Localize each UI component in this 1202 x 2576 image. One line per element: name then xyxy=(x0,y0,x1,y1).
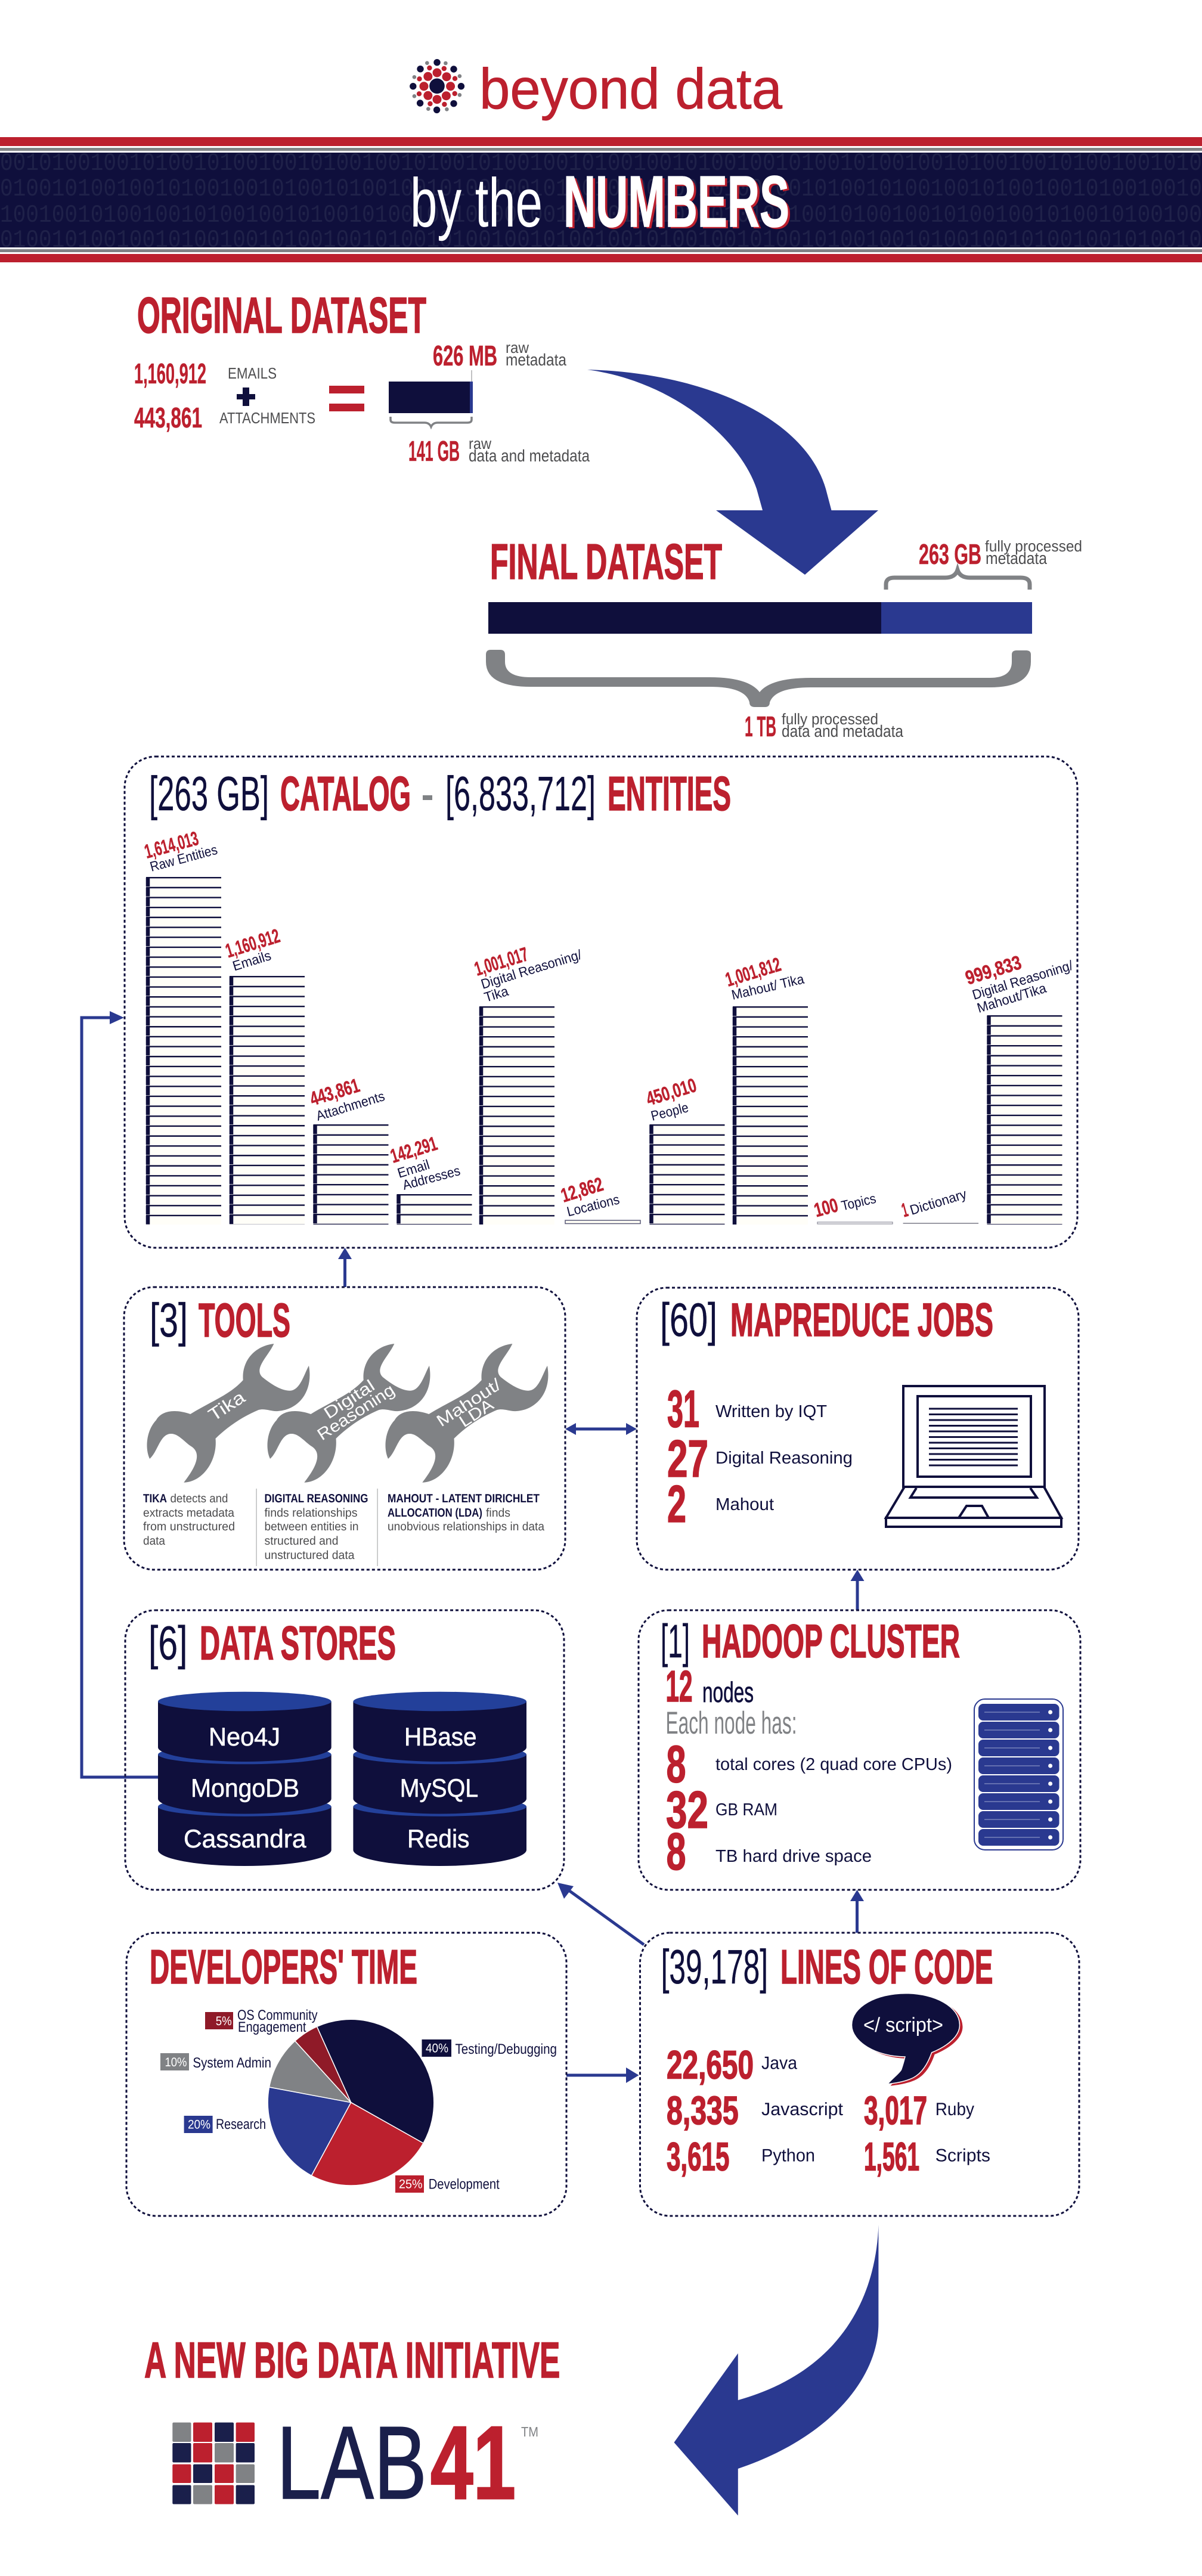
mapreduce counts: 2 xyxy=(667,1474,686,1533)
tika description: data xyxy=(143,1535,166,1548)
code counts: 22,650 xyxy=(667,2043,754,2088)
digital reasoning description: finds relationships xyxy=(265,1506,358,1520)
final dataset bar: fully processed xyxy=(782,710,878,728)
panel: data stores xyxy=(125,1610,564,1890)
icon: lab41 square grid xyxy=(172,2423,255,2504)
code counts xyxy=(667,2043,990,2180)
legend: research: 20% xyxy=(188,2118,210,2132)
original dataset bar: metadata xyxy=(506,351,566,369)
bar: emails xyxy=(223,925,305,1225)
legend: system admin: 10% xyxy=(165,2056,187,2069)
lines of code heading: LINES OF CODE xyxy=(780,1940,993,1994)
mapreduce heading: [60] xyxy=(660,1293,717,1346)
original dataset bar: 626 MB xyxy=(433,340,497,372)
digital reasoning description: between entities in xyxy=(265,1520,359,1533)
original dataset bar: 141 GB xyxy=(408,436,460,467)
code counts: 8,335 xyxy=(667,2088,739,2133)
logo: lab41: 41 xyxy=(430,2404,516,2521)
node spec list: 12 xyxy=(665,1661,693,1711)
bar: email addresses: 142,291 xyxy=(388,1132,440,1167)
banner title: NUMBERS xyxy=(563,161,789,242)
bar: attachments: Attachments xyxy=(314,1088,386,1124)
code counts: 3,615 xyxy=(667,2135,729,2180)
final dataset bar: data and metadata xyxy=(782,722,903,740)
node spec list: 8 xyxy=(667,1822,686,1881)
legend: os community engagement: OS Community xyxy=(237,2007,317,2023)
node spec list: TB hard drive space xyxy=(715,1847,872,1866)
database cylinder right: MySQL xyxy=(400,1774,478,1803)
bar: email addresses xyxy=(388,1132,472,1225)
bar: attachments: 443,861 xyxy=(307,1074,362,1110)
bar: dictionary xyxy=(899,1186,978,1224)
icon: digital reasoning wrench: Reasoning xyxy=(314,1380,398,1444)
mapreduce counts: 27 xyxy=(667,1429,708,1488)
icon: mahout lda wrench xyxy=(385,1344,548,1483)
legend: research xyxy=(184,2116,266,2133)
legend: testing/debugging: Testing/Debugging xyxy=(456,2041,557,2057)
digital reasoning description: DIGITAL REASONING xyxy=(265,1492,368,1505)
bar: people: People xyxy=(649,1099,690,1124)
bar: topics xyxy=(811,1191,893,1224)
bar: digital reasoning / mahout / tika: Digital Reasoning/ xyxy=(970,957,1075,1003)
icon: script speech bubble: </ script> xyxy=(863,2014,943,2036)
bar: emails: 1,160,912 xyxy=(223,925,282,962)
panel: developers' time xyxy=(126,1933,566,2216)
icon: beyond data dot burst xyxy=(410,59,464,113)
panel: hadoop cluster xyxy=(639,1610,1080,1890)
bar: locations xyxy=(558,1173,640,1223)
mapreduce heading: MAPREDUCE JOBS xyxy=(730,1293,993,1346)
original dataset bar xyxy=(389,339,590,467)
mapreduce counts: Mahout xyxy=(715,1495,774,1514)
bar: digital reasoning / tika: 1,001,017 xyxy=(472,943,531,980)
banner title: by the xyxy=(410,164,543,241)
hadoop heading: [1] xyxy=(661,1614,690,1667)
tools heading: TOOLS xyxy=(199,1294,290,1347)
final dataset bar: fully processed xyxy=(985,537,1082,555)
mahout description: unobvious relationships in data xyxy=(388,1520,545,1533)
tika description: detects and xyxy=(171,1492,228,1505)
banner: by the numbers xyxy=(0,137,1202,262)
logo: lab41: LAB xyxy=(277,2404,427,2521)
panel: catalog xyxy=(125,757,1077,1248)
logo: lab41 xyxy=(172,2404,538,2521)
arrow: lines of code to data stores xyxy=(557,1883,644,1945)
bar: digital reasoning / tika: Tika xyxy=(482,983,510,1005)
mapreduce counts: 31 xyxy=(667,1380,699,1438)
code counts: 1,561 xyxy=(864,2135,919,2180)
hadoop heading xyxy=(661,1614,960,1667)
panel: mapreduce jobs xyxy=(637,1288,1079,1570)
database cylinder right: HBase xyxy=(404,1723,477,1752)
mapreduce counts: Digital Reasoning xyxy=(715,1449,853,1468)
icon: digital reasoning wrench xyxy=(267,1344,430,1483)
bar: topics: 100 xyxy=(811,1194,840,1221)
database cylinder right: Redis xyxy=(407,1825,470,1853)
legend: development: Development xyxy=(429,2177,500,2193)
logo: beyond data xyxy=(410,57,783,121)
bar: dictionary: Dictionary xyxy=(908,1186,969,1218)
catalog heading xyxy=(149,767,731,821)
logo: lab41: TM xyxy=(521,2424,538,2439)
code counts: 3,017 xyxy=(864,2088,927,2133)
connector: data stores to catalog xyxy=(82,1011,158,1777)
code counts: Java xyxy=(761,2054,797,2073)
bar: attachments xyxy=(307,1074,389,1225)
legend: os community engagement: Engagement xyxy=(238,2019,306,2035)
bar: dictionary: 1 xyxy=(899,1198,910,1221)
database cylinder left: MongoDB xyxy=(191,1774,299,1803)
final dataset bar xyxy=(486,537,1082,743)
code counts: Ruby xyxy=(935,2100,974,2119)
data stores heading: DATA STORES xyxy=(200,1617,396,1669)
lines of code heading: [39,178] xyxy=(661,1940,768,1994)
bar: mahout / tika: 1,001,812 xyxy=(723,953,783,991)
banner title: NUMBERS xyxy=(566,163,792,244)
original dataset bar: raw xyxy=(506,339,529,357)
bar: people: 450,010 xyxy=(643,1074,699,1110)
mahout description: MAHOUT - LATENT DIRICHLET xyxy=(388,1492,540,1505)
mapreduce counts xyxy=(667,1380,853,1533)
catalog heading: ENTITIES xyxy=(608,767,731,821)
arrow: hadoop to mapreduce xyxy=(850,1570,865,1610)
panel: lines of code xyxy=(640,1933,1079,2216)
bar: raw entities: Raw Entities xyxy=(148,842,219,875)
lines of code heading xyxy=(661,1940,993,1994)
icon: tika wrench: Tika xyxy=(205,1387,249,1425)
legend: research: Research xyxy=(216,2116,266,2132)
mapreduce counts: Written by IQT xyxy=(715,1402,827,1421)
bar: digital reasoning / mahout / tika: Mahout/Tika xyxy=(975,980,1048,1016)
original dataset bar: raw xyxy=(469,435,491,452)
node spec list: nodes xyxy=(702,1677,754,1709)
original dataset equation: EMAILS xyxy=(228,364,277,382)
heading: a new big data initiative: A NEW BIG DATA INITIATIVE xyxy=(144,2332,560,2389)
mahout description: ALLOCATION (LDA) xyxy=(388,1506,482,1520)
database cylinder left xyxy=(158,1692,332,1866)
data stores heading: [6] xyxy=(148,1617,187,1669)
database cylinder left: Cassandra xyxy=(184,1825,306,1853)
tika description: from unstructured xyxy=(143,1520,235,1533)
data stores heading xyxy=(148,1617,396,1669)
tika description: TIKA xyxy=(143,1492,167,1505)
node spec list xyxy=(665,1661,952,1881)
arrow: lines of code to hadoop xyxy=(850,1890,864,1933)
heading: original dataset: ORIGINAL DATASET xyxy=(137,287,426,344)
mahout description xyxy=(388,1492,545,1533)
catalog heading: [263 GB] xyxy=(149,767,269,821)
panel: tools xyxy=(124,1287,565,1570)
catalog heading: CATALOG xyxy=(280,767,411,821)
bar: digital reasoning / mahout / tika xyxy=(963,951,1075,1225)
original dataset equation: 443,861 xyxy=(134,402,202,434)
original dataset equation: ATTACHMENTS xyxy=(219,409,315,427)
bar: raw entities: 1,614,013 xyxy=(142,827,201,863)
database cylinder left: Neo4J xyxy=(209,1723,280,1752)
node spec list: Each node has: xyxy=(665,1706,797,1741)
icon: digital reasoning wrench: Digital xyxy=(320,1376,378,1422)
digital reasoning description xyxy=(265,1492,368,1562)
pie chart xyxy=(268,2019,434,2186)
legend: system admin: System Admin xyxy=(193,2055,271,2071)
banner title xyxy=(410,161,792,244)
node spec list: 8 xyxy=(667,1735,686,1793)
node spec list: 32 xyxy=(666,1780,708,1839)
bar: topics: Topics xyxy=(839,1191,878,1213)
tools heading xyxy=(150,1294,290,1347)
icon: mahout lda wrench: Mahout/ xyxy=(433,1375,504,1430)
bar: emails: Emails xyxy=(231,947,273,974)
original dataset equation xyxy=(134,358,364,434)
original dataset equation: 1,160,912 xyxy=(134,358,206,390)
bar: email addresses: Addresses xyxy=(401,1163,462,1193)
code counts: Python xyxy=(761,2146,815,2166)
bar: mahout / tika xyxy=(723,953,808,1225)
icon: script speech bubble xyxy=(851,1994,962,2086)
arrow: tools and mapreduce two-way xyxy=(565,1423,637,1435)
catalog heading: [6,833,712] xyxy=(445,767,596,821)
digital reasoning description: structured and xyxy=(265,1535,339,1548)
mapreduce heading xyxy=(660,1293,993,1346)
legend: os community engagement xyxy=(205,2007,317,2035)
tools heading: [3] xyxy=(150,1294,188,1347)
mahout description: finds xyxy=(486,1506,510,1520)
bar: email addresses: Email xyxy=(395,1157,432,1181)
final dataset bar: metadata xyxy=(986,549,1047,568)
final dataset bar: 263 GB xyxy=(919,539,981,571)
bar: locations: 12,862 xyxy=(558,1173,606,1207)
database cylinder right xyxy=(353,1692,526,1866)
code counts: Scripts xyxy=(935,2146,990,2166)
logo wordmark: beyond data xyxy=(479,57,783,121)
legend: development: 25% xyxy=(399,2178,422,2191)
tika description: extracts metadata xyxy=(143,1506,235,1520)
icon: server rack xyxy=(974,1699,1063,1850)
bar: mahout / tika: Mahout/ Tika xyxy=(730,971,806,1003)
bar: locations: Locations xyxy=(565,1191,621,1219)
legend: system admin xyxy=(160,2053,271,2071)
final dataset bar: 1 TB xyxy=(745,711,776,743)
code counts: Javascript xyxy=(761,2100,844,2119)
digital reasoning description: unstructured data xyxy=(265,1549,355,1562)
legend: os community engagement: 5% xyxy=(216,2014,232,2028)
icon: laptop xyxy=(886,1386,1061,1527)
bar: digital reasoning / mahout / tika: 999,833 xyxy=(963,951,1024,989)
node spec list: total cores (2 quad core CPUs) xyxy=(715,1755,952,1774)
arrow: to lab41 initiative xyxy=(674,2225,878,2516)
heading: final dataset: FINAL DATASET xyxy=(490,534,722,590)
bar: people xyxy=(643,1074,725,1225)
legend: testing/debugging: 40% xyxy=(426,2042,448,2056)
bar: digital reasoning / tika xyxy=(472,943,584,1225)
arrow: developers time to lines of code xyxy=(566,2067,639,2083)
bar: digital reasoning / tika: Digital Reasoning/ xyxy=(479,947,584,992)
legend: testing/debugging xyxy=(422,2039,557,2057)
legend: development xyxy=(395,2175,500,2193)
original dataset bar: data and metadata xyxy=(469,447,590,465)
developers time heading: DEVELOPERS' TIME xyxy=(150,1940,417,1994)
node spec list: GB RAM xyxy=(715,1800,777,1819)
hadoop heading: HADOOP CLUSTER xyxy=(702,1614,960,1667)
icon: mahout lda wrench: LDA xyxy=(456,1395,497,1431)
arrow: original to final dataset xyxy=(587,370,878,575)
icon: tika wrench xyxy=(147,1344,309,1483)
arrow: tools to catalog xyxy=(338,1248,352,1287)
bar: raw entities xyxy=(142,827,221,1225)
tika description xyxy=(143,1492,235,1548)
